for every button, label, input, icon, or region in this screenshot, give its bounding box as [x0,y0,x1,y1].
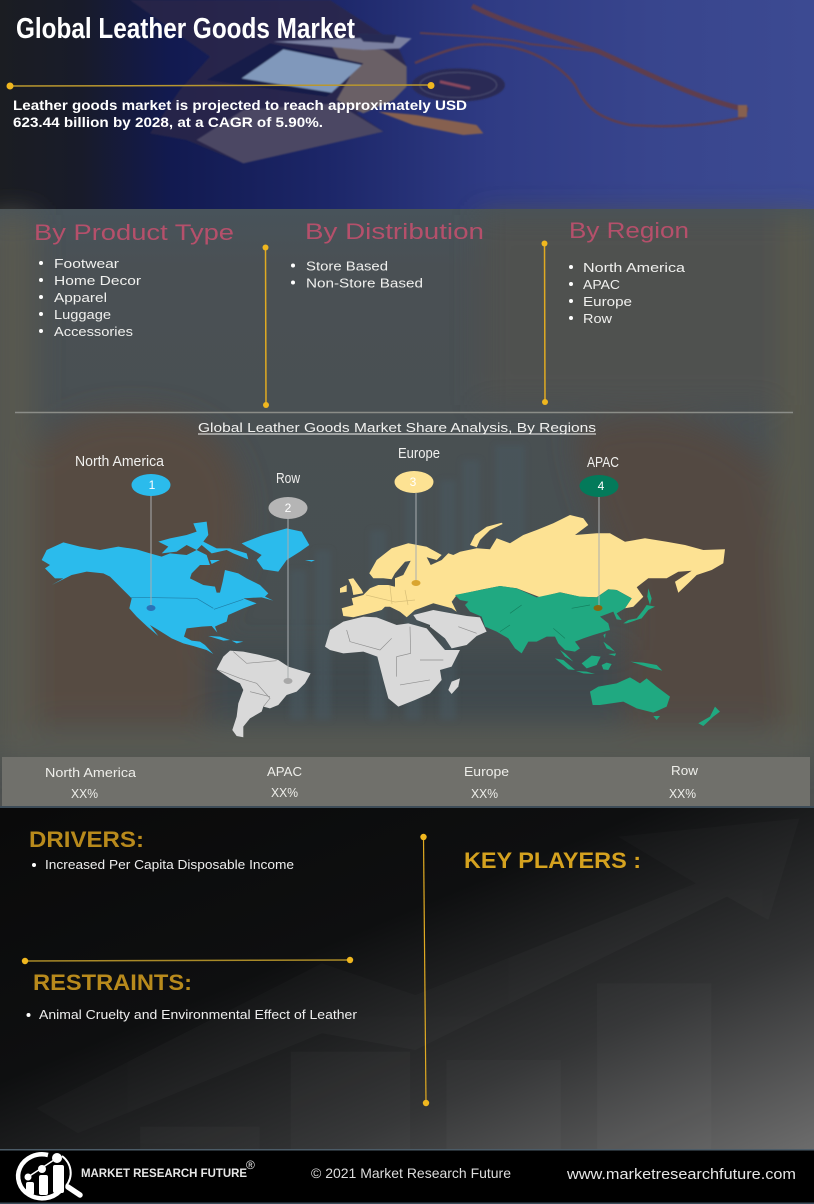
registered mark: ® [246,1158,255,1172]
list: distribution channels: Store Based [306,258,388,274]
panel: share table [2,757,810,806]
heading: key players: KEY PLAYERS : [464,848,641,873]
list: product types: Apparel [54,290,107,305]
list: product types [39,256,142,339]
divider: distribution and region [542,240,548,405]
copyright: © 2021 Market Research Future [311,1165,511,1181]
heading: by distribution: By Distribution [305,219,484,244]
region: north america [42,522,315,654]
map pin: row: Row [276,470,300,487]
text block: market summary: Leather goods market is projected to reach approximately USD [13,97,467,113]
panel: share table: XX% [669,787,696,801]
footer brand name: MARKET RESEARCH FUTURE [81,1168,247,1180]
list: product types: Home Decor [54,273,142,288]
map pin: north america: 1 [149,478,156,492]
divider: drivers and restraints [22,957,353,964]
list: product types: Accessories [54,324,134,339]
map pin: row [268,470,308,684]
panel: segmentation and map background [0,209,814,808]
world map [42,515,725,737]
map pin: apac [580,454,619,611]
text block: market summary [13,97,467,130]
region: asia pacific [455,586,720,726]
panel: share table: APAC [267,765,302,779]
map pin: apac: 4 [598,479,605,493]
panel: by product type [34,220,234,339]
text block: market summary: 623.44 billion by 2028, at a CAGR of 5.90%. [13,114,323,130]
map pin: europe [394,445,440,586]
list: product types: Luggage [54,307,111,322]
panel: footer [0,1149,814,1204]
text block: driver item: Increased Per Capita Disposable Income [45,857,294,872]
map pin: north america [75,453,170,611]
heading: by region: By Region [569,218,689,243]
heading: restraints: RESTRAINTS: [33,970,192,995]
header divider with dots [6,82,434,90]
heading: by product type: By Product Type [34,220,234,245]
list: regions: Row [583,311,613,326]
panel: by distribution [291,219,484,290]
map pin: row: 2 [285,501,292,515]
panel: share table: XX% [471,787,498,801]
divider: product and distribution [262,244,269,408]
list: regions: APAC [583,277,620,292]
panel: by region [569,218,689,326]
map pin: europe: Europe [398,445,440,462]
panel: share table: Row [671,764,699,778]
region: rest of world [217,610,487,737]
map pin: apac: APAC [587,454,619,471]
panel: share table: North America [45,766,136,780]
list: product types: Footwear [54,256,120,271]
list: regions: Europe [583,294,632,309]
panel: share table: Europe [464,765,509,779]
heading: map chart title: Global Leather Goods Market Share Analysis, By Regions [198,420,597,435]
list: distribution channels [291,258,423,290]
heading: drivers: DRIVERS: [29,827,144,852]
list: distribution channels: Non-Store Based [306,276,423,290]
icon: market research future logo [18,1153,80,1198]
panel: share table: XX% [271,786,298,800]
panel: header banner [0,0,814,209]
title: Global Leather Goods Market [16,13,355,45]
map pin: north america: North America [75,453,165,470]
website: www.marketresearchfuture.com [566,1167,796,1183]
panel: share table: XX% [71,787,98,801]
text block: restraint item: Animal Cruelty and Environmental Effect of Leather [39,1007,358,1022]
divider: vertical gold line [420,834,429,1106]
map pin: europe: 3 [410,475,417,489]
panel: drivers [29,827,294,872]
panel: restraints [26,970,358,1022]
list: regions: North America [583,260,686,275]
list: regions [569,260,686,326]
photo: leather bag and strap [130,0,748,163]
region: europe and russia [340,515,725,617]
panel: drivers, restraints and key players background [0,806,814,1150]
